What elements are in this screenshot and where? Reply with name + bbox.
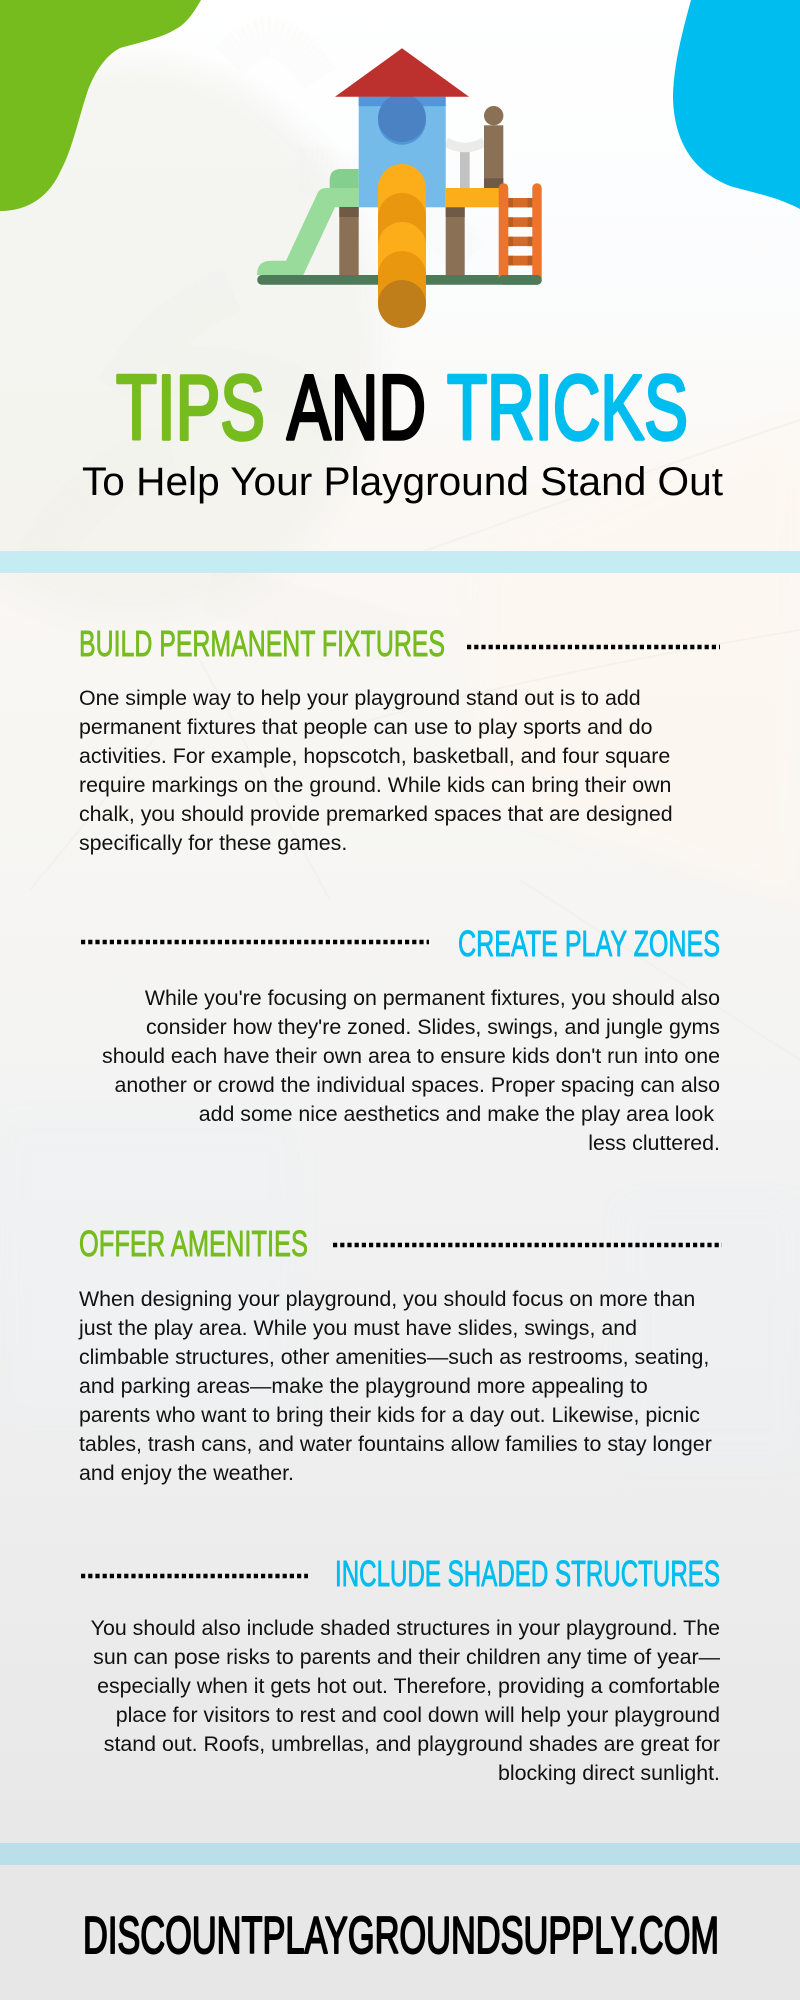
body text: activities. For example, hopscotch, basketball, and four square (79, 744, 670, 768)
left post (339, 207, 359, 275)
slide back (330, 169, 359, 190)
green corner blob (0, 0, 201, 211)
section 2: create play zones (81, 923, 720, 1155)
ground bar (257, 275, 542, 285)
body text: chalk, you should provide premarked spaces that are designed (79, 802, 673, 826)
yellow tube slide (378, 164, 426, 328)
body text: specifically for these games. (79, 831, 347, 855)
green slide (257, 188, 359, 275)
dotted rule (81, 1574, 308, 1578)
body text: stand out. Roofs, umbrellas, and playground shades are great for (104, 1732, 720, 1756)
body text: blocking direct sunlight. (498, 1761, 720, 1785)
body text: especially when it gets hot out. Therefore, providing a comfortable (97, 1674, 720, 1698)
body text: and parking areas—make the playground more appealing to (79, 1374, 648, 1398)
dotted rule (467, 645, 720, 649)
swing arc and support (446, 142, 484, 188)
section 4: include shaded structures (81, 1553, 721, 1785)
body text: add some nice aesthetics and make the play area look (199, 1102, 714, 1126)
brown pole and knob (484, 106, 503, 188)
body text: should each have their own area to ensure kids don't run into one (102, 1044, 720, 1068)
body text: When designing your playground, you should focus on more than (79, 1287, 695, 1311)
body text: parents who want to bring their kids for a day out. Likewise, picnic (79, 1403, 700, 1427)
bottom divider band (0, 1843, 800, 1865)
body text: While you're focusing on permanent fixtures, you should also (145, 986, 720, 1010)
title: TRICKS (447, 357, 688, 459)
body text: tables, trash cans, and water fountains allow families to stay longer (79, 1432, 712, 1456)
top divider band (0, 551, 800, 573)
right post (446, 207, 465, 275)
subtitle: To Help Your Playground Stand Out (82, 460, 723, 504)
body text: require markings on the ground. While kids can bring their own (79, 773, 671, 797)
dotted rule (333, 1243, 722, 1247)
body text: place for visitors to rest and cool down will help your playground (116, 1703, 720, 1727)
body text: another or crowd the individual spaces. Proper spacing can also (114, 1073, 720, 1097)
body text (78, 1287, 712, 1485)
body text: sun can pose risks to parents and their children any time of year— (93, 1645, 721, 1669)
body text (79, 686, 673, 855)
body text: You should also include shaded structures in your playground. The (91, 1616, 720, 1640)
body text: less cluttered. (588, 1131, 720, 1155)
roof (335, 48, 469, 97)
body text: just the play area. While you must have slides, swings, and (78, 1316, 637, 1340)
title: TIPS (116, 357, 265, 459)
icon: playground structure (257, 48, 542, 328)
body text: One simple way to help your playground stand out is to add (79, 686, 641, 710)
heading: OFFER AMENITIES (79, 1223, 308, 1264)
body text: climbable structures, other amenities—such as restrooms, seating, (79, 1345, 709, 1369)
body text (91, 1616, 721, 1785)
title (116, 357, 688, 459)
section 3: offer amenities (78, 1223, 722, 1485)
section 1: build permanent fixtures (79, 623, 720, 855)
body text (102, 986, 720, 1155)
body text: consider how they're zoned. Slides, swings, and jungle gyms (146, 1015, 720, 1039)
body text: and enjoy the weather. (79, 1461, 294, 1485)
blue corner blob (673, 0, 800, 209)
dotted rule (81, 940, 429, 944)
heading: BUILD PERMANENT FIXTURES (79, 623, 445, 664)
ladder (499, 183, 542, 285)
body text: permanent fixtures that people can use to play sports and do (79, 715, 653, 739)
tower (359, 94, 446, 207)
yellow platform (446, 188, 500, 207)
title: AND (287, 357, 426, 459)
